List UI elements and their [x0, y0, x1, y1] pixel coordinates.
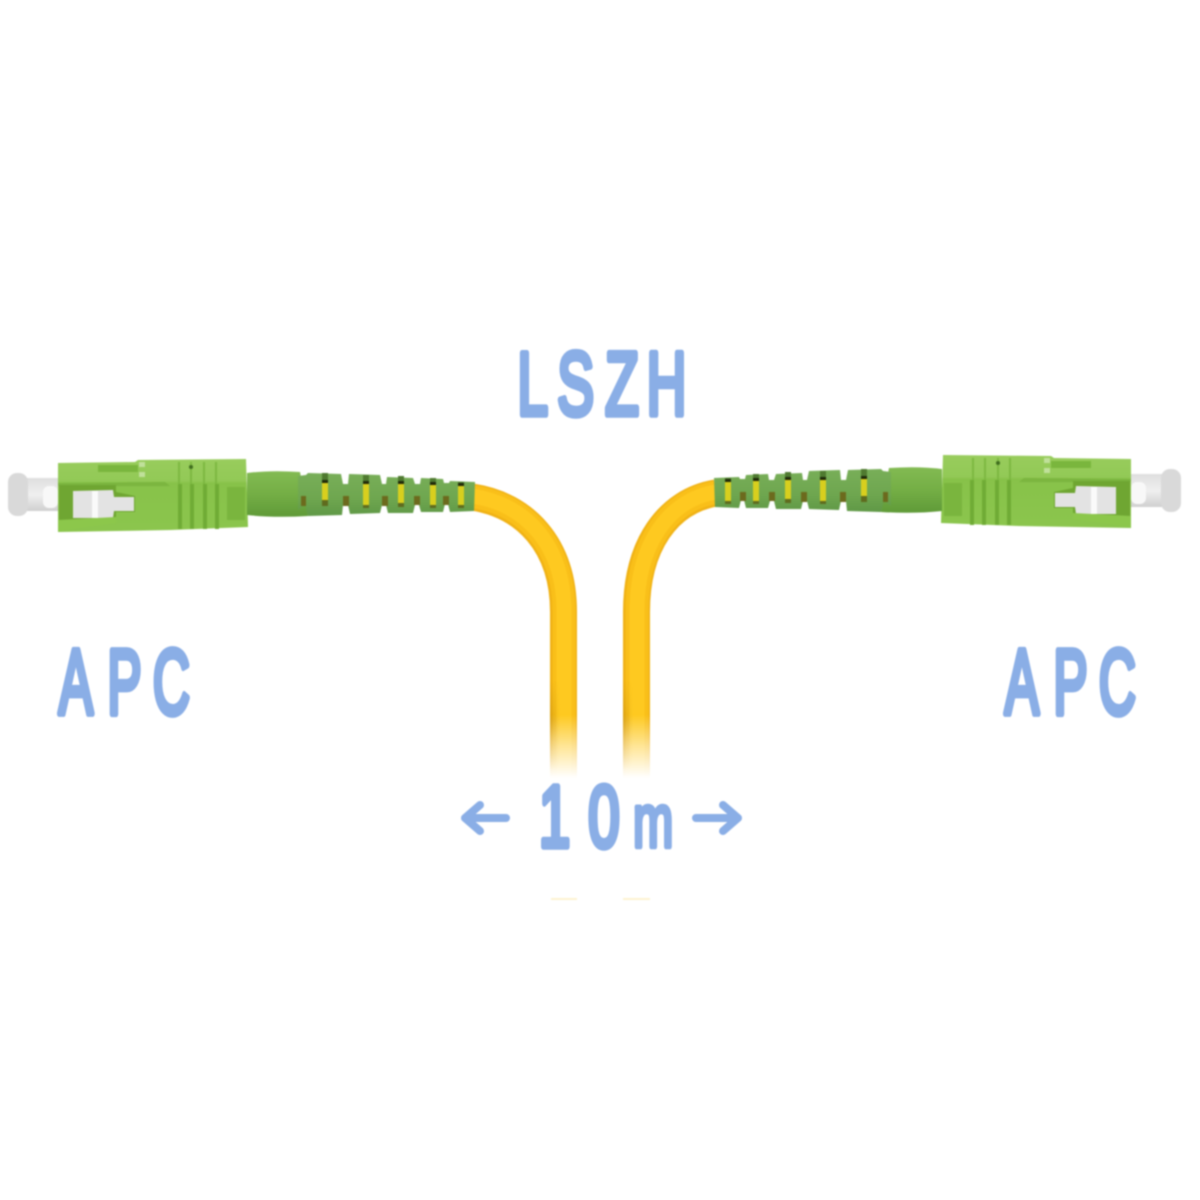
label: LSZH: LSZH	[517, 334, 687, 434]
left yellow cable	[472, 496, 564, 780]
latch window	[58, 485, 135, 531]
length label: 10m: m	[633, 781, 673, 863]
connector neck	[247, 471, 308, 517]
right arrow	[696, 805, 738, 831]
left arrow	[465, 805, 506, 831]
ferrule	[8, 473, 62, 516]
right SC/APC connector	[714, 455, 1181, 528]
left SC/APC connector	[8, 459, 475, 532]
length label: 10m: 10	[539, 768, 620, 865]
right yellow cable	[636, 492, 716, 780]
strain relief boot	[298, 473, 475, 516]
label: left APC: APC	[59, 631, 190, 733]
cable fade edge shading	[550, 698, 630, 760]
connector body	[58, 459, 248, 532]
faint cable remnants	[551, 898, 650, 900]
label: right APC: APC	[1005, 631, 1136, 733]
